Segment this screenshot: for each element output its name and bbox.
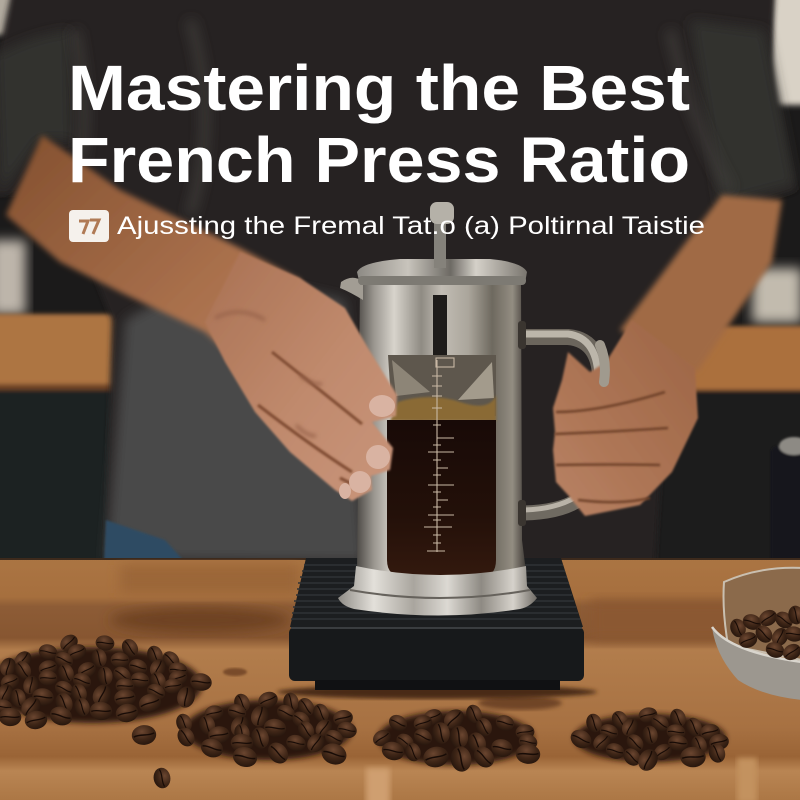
bean pile 3: [370, 703, 541, 773]
single bean: [131, 724, 157, 746]
left hand fingernails: [339, 395, 395, 499]
right arm and hand: [553, 195, 782, 516]
right hand finger creases: [555, 392, 668, 502]
icon: subtitle badge: [69, 210, 109, 242]
press window: brewed coffee: [387, 420, 496, 577]
left hand creases between fingers: [258, 352, 362, 484]
shirt: [0, 0, 796, 562]
background: wooden counter shelf right: [655, 326, 800, 562]
steel bowl: [712, 627, 800, 700]
grinder at right edge: [771, 437, 800, 566]
press body: [357, 283, 526, 572]
press handle side over palm: [600, 345, 605, 382]
press base ring: [338, 566, 537, 616]
right forearm: [620, 195, 782, 372]
single bean front: [152, 766, 172, 790]
press rod and knob: [434, 220, 446, 268]
left arm and hand: [6, 135, 397, 501]
title: French Press Ratio: [68, 124, 690, 196]
left hand knuckles: [215, 312, 322, 436]
title: Mastering the Best: [68, 52, 690, 124]
jeans: [104, 520, 185, 562]
French press: [338, 202, 600, 616]
scale platform: [277, 558, 597, 699]
subtitle: Ajussting the Fremal Tat.o (a) Poltirnal Taistie: [117, 212, 705, 240]
bowl glass upper: [724, 568, 800, 660]
glass bowl of beans: [712, 568, 800, 700]
press measurement scale: [424, 358, 454, 552]
bean pile 1: [0, 631, 213, 731]
table: [0, 558, 800, 800]
bean pile 2: [174, 689, 359, 770]
bean pile 4: [567, 706, 730, 774]
press handle: [524, 334, 600, 513]
press window: foam and grounds: [388, 355, 496, 416]
beans in bowl: [728, 604, 800, 663]
press lid: [357, 259, 527, 285]
left forearm: [6, 135, 300, 420]
left hand: [205, 252, 397, 501]
title: [68, 52, 690, 196]
background: wooden counter shelf left: [0, 314, 134, 562]
right hand: [553, 320, 698, 516]
background: room and wall: [0, 0, 800, 560]
